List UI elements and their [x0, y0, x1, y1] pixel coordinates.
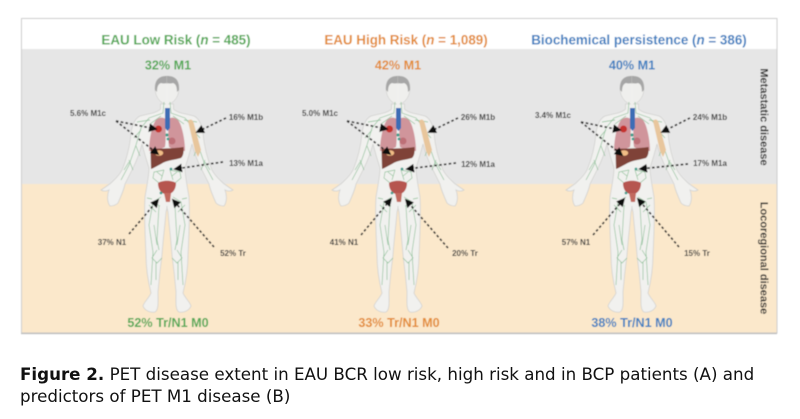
figure: biochemical persistence: [531, 32, 747, 330]
site labels: [302, 109, 495, 258]
heading: EAU low risk: EAU Low Risk (n = 485): [101, 32, 251, 48]
caption: [20, 364, 754, 406]
site labels: 17% M1a: [693, 159, 727, 168]
panel: metastatic disease band: [21, 49, 777, 184]
M1 headline: 40% M1: [609, 58, 655, 72]
heading: EAU high risk: EAU High Risk (n = 1,089): [324, 32, 488, 48]
icon: body: [101, 76, 233, 312]
figure: EAU high risk: [302, 32, 495, 330]
figure: EAU low risk: [70, 32, 263, 330]
site labels: 15% Tr: [684, 249, 710, 258]
site labels: 26% M1b: [461, 113, 495, 122]
site labels: 41% N1: [330, 238, 359, 247]
arrows: [116, 118, 226, 247]
panel: locoregional disease band: [21, 184, 777, 333]
arrows: [347, 118, 458, 248]
site labels: 20% Tr: [452, 249, 478, 258]
site labels: 5.0% M1c: [302, 109, 339, 118]
locoregional headline: 38% Tr/N1 M0: [591, 316, 673, 330]
icon: body: [332, 76, 464, 312]
heading: biochemical persistence: Biochemical persistence (n = 386): [531, 32, 747, 48]
site labels: 57% N1: [562, 238, 591, 247]
arrows: [581, 118, 690, 247]
caption: predictors of PET M1 disease (B): [20, 386, 290, 406]
site labels: 5.6% M1c: [70, 109, 107, 118]
site labels: 3.4% M1c: [535, 111, 572, 120]
site labels: 24% M1b: [693, 113, 727, 122]
panel: white header band: [21, 19, 777, 49]
site labels: [70, 109, 263, 258]
site labels: 52% Tr: [220, 249, 246, 258]
side label: metastatic disease: Metastatic disease: [758, 68, 770, 166]
site labels: [535, 111, 727, 258]
icon: body: [566, 76, 698, 312]
site labels: 13% M1a: [229, 159, 263, 168]
M1 headline: 42% M1: [375, 58, 421, 72]
caption: Figure 2. PET disease extent in EAU BCR low risk, high risk and in BCP patients (A) and: [20, 364, 754, 384]
site labels: 16% M1b: [229, 113, 263, 122]
site labels: 37% N1: [98, 238, 127, 247]
locoregional headline: 52% Tr/N1 M0: [127, 316, 209, 330]
M1 headline: 32% M1: [145, 58, 191, 72]
side label: locoregional disease: Locoregional disease: [758, 202, 770, 314]
locoregional headline: 33% Tr/N1 M0: [358, 316, 440, 330]
site labels: 12% M1a: [461, 160, 495, 169]
panel border: [22, 18, 777, 333]
